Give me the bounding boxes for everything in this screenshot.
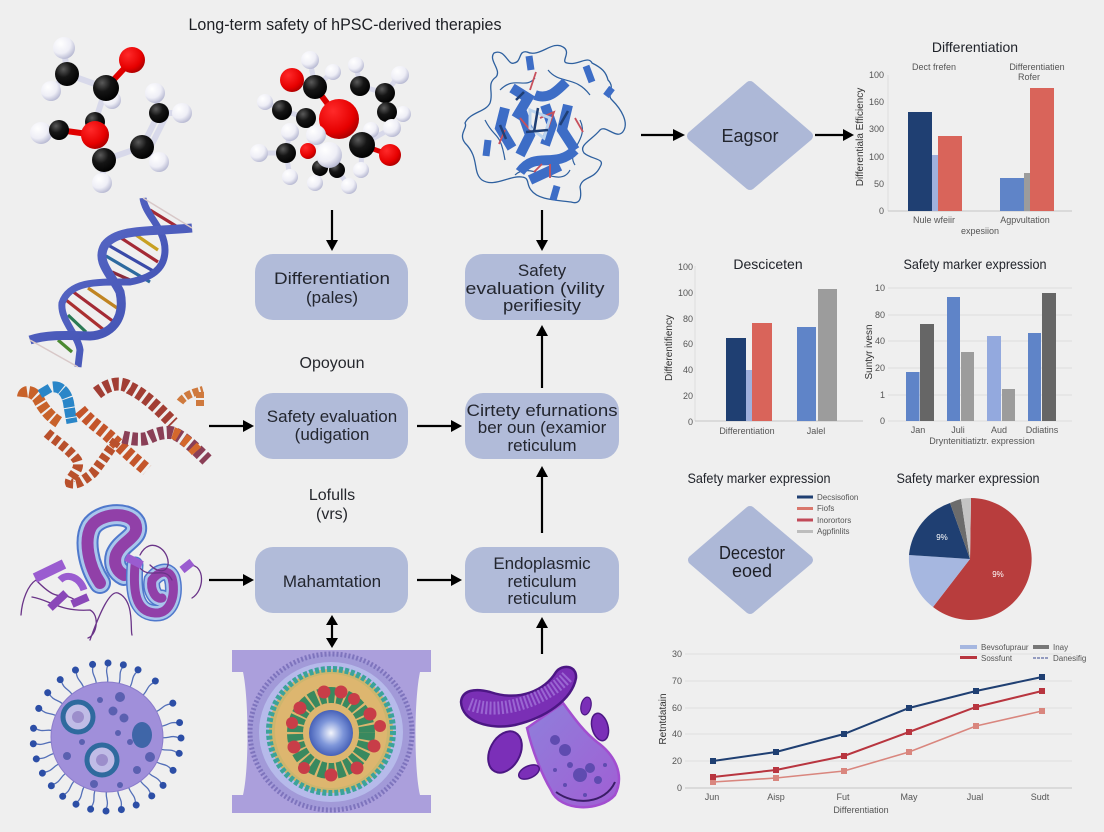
bar chart: desciceten: 80 [683, 314, 693, 324]
box: endoplasmic reticulum: reticulum [508, 589, 576, 608]
bar chart: desciceten: 0 [688, 417, 693, 427]
bar chart: desciceten [664, 256, 863, 436]
bar chart: safety marker expression: 20 [875, 363, 885, 373]
diamond: decestor [693, 511, 808, 609]
bar chart: differentiation: Differentiatien [1009, 62, 1065, 72]
box: differentiation [255, 254, 408, 320]
pie chart: safety marker expression [909, 498, 1032, 620]
bar chart: desciceten: 60 [683, 339, 693, 349]
icon: blue protein ribbon structure [462, 45, 625, 203]
box: safety evaluation top: Safety [518, 261, 567, 280]
legend: diamond section: Fiofs [817, 504, 834, 513]
label: lofulls: (vrs) [316, 506, 348, 523]
bar chart: differentiation [855, 39, 1072, 236]
pie chart: safety marker expression: 9% [936, 533, 948, 542]
bar chart: desciceten: Jalel [807, 426, 825, 436]
icon: stem cell with surface receptors [29, 660, 184, 814]
bar chart: safety marker expression: Aud [991, 425, 1007, 435]
arrow: mahamtation to endoplasmic [417, 574, 462, 586]
line chart: differentiation: Sossfunt [981, 654, 1013, 663]
arrow: up from mitochondrion [536, 617, 548, 654]
bar chart: differentiation: Dect frefen [912, 62, 956, 72]
box: reticulum middle: Cirtety efurnations [466, 401, 618, 420]
bar chart: safety marker expression: Juli [951, 425, 965, 435]
bar chart: differentiation: Differentiala Efficiency [855, 88, 866, 186]
arrow: down to safety [536, 210, 548, 251]
icon: orange alpha-helix protein [23, 384, 207, 484]
heading: safety marker expression right: Safety marker expression [896, 470, 1040, 486]
bar chart: safety marker expression: 10 [875, 283, 885, 293]
line chart: differentiation: Fut [836, 792, 850, 802]
bar chart: safety marker expression: 1 [880, 390, 885, 400]
bar chart: desciceten: 100 [678, 288, 693, 298]
bar chart: differentiation: 50 [874, 179, 884, 189]
line chart: differentiation: Jun [705, 792, 719, 802]
legend: diamond section [797, 493, 858, 536]
icon: mitochondrion [461, 667, 619, 807]
line chart: differentiation: Inay [1053, 643, 1068, 652]
line chart: differentiation [658, 643, 1086, 815]
box: reticulum middle: ber oun (examior [478, 418, 607, 437]
box: reticulum middle [465, 393, 619, 459]
bar chart: differentiation: 100 [869, 152, 884, 162]
box: differentiation: (pales) [306, 288, 358, 307]
line chart: differentiation: Aisp [767, 792, 785, 802]
line chart: differentiation: 60 [672, 703, 682, 713]
box: endoplasmic reticulum [465, 547, 619, 613]
bar chart: desciceten: 20 [683, 391, 693, 401]
box: safety evaluation top [465, 254, 619, 320]
arrow: safety evaluation to reticulum [417, 420, 462, 432]
legend: diamond section: Inorortors [817, 516, 851, 525]
label: lofulls [309, 487, 355, 523]
diamond: decestor: Decestor [719, 543, 785, 563]
line chart: differentiation: Danesifig [1053, 654, 1086, 663]
diamond: eagsor: Eagsor [721, 126, 779, 146]
line chart: differentiation: Retntdatain [658, 693, 669, 745]
bar chart: differentiation: 0 [879, 206, 884, 216]
line chart: differentiation: May [900, 792, 918, 802]
arrow: eagsor to chart [815, 129, 854, 141]
title: Long-term safety of hPSC-derived therapies [188, 15, 502, 34]
bar chart: desciceten: Differentifiency [664, 315, 675, 381]
line chart: differentiation: Sudt [1031, 792, 1050, 802]
arrow: up to safety [536, 325, 548, 388]
box: safety evaluation middle: (udigation [295, 425, 369, 444]
label: opoyoun: Opoyoun [300, 355, 364, 372]
legend: diamond section: Agpfinlits [817, 527, 849, 536]
box: safety evaluation middle: Safety evaluation [267, 407, 397, 426]
icon: small molecule ball-and-stick model [30, 37, 192, 193]
bar chart: safety marker expression [864, 256, 1072, 446]
box: safety evaluation top: perifiesity [503, 296, 582, 315]
label: lofulls: Lofulls [309, 487, 355, 504]
bar chart: safety marker expression: 0 [880, 416, 885, 426]
box: mahamtation: Mahamtation [283, 572, 381, 591]
legend: diamond section: Decsisofion [817, 493, 858, 502]
arrow: down to differentiation [326, 210, 338, 251]
box: reticulum middle: reticulum [508, 436, 576, 455]
bar chart: desciceten: Desciceten [733, 256, 803, 272]
bar chart: differentiation: Rofer [1018, 72, 1040, 82]
bar chart: differentiation: 100 [869, 70, 884, 80]
bar chart: differentiation: Differentiation [932, 39, 1018, 55]
box: mahamtation [255, 547, 408, 613]
line chart: differentiation: 20 [672, 756, 682, 766]
line chart: differentiation: Differentiation [833, 805, 889, 815]
line chart: differentiation: Bevsofupraur [981, 643, 1029, 652]
diamond: decestor: eoed [732, 561, 772, 581]
arrow: protein to safety evaluation [209, 420, 254, 432]
arrow: protein to eagsor [641, 129, 685, 141]
icon: purple beta-sheet protein [21, 515, 202, 640]
line chart: differentiation: 70 [672, 676, 682, 686]
box: endoplasmic reticulum: reticulum [508, 572, 576, 591]
bar chart: desciceten: 40 [683, 365, 693, 375]
arrow: up to reticulum [536, 466, 548, 533]
icon: complex molecule ball-and-stick model [250, 51, 411, 194]
bar chart: differentiation: Agpvultation [1000, 215, 1050, 225]
bar chart: safety marker expression: Safety marker expression [904, 256, 1046, 272]
line chart: differentiation: 40 [672, 729, 682, 739]
box: differentiation: Differentiation [274, 269, 390, 288]
heading: safety marker expression left: Safety marker expression [688, 470, 830, 486]
diamond: eagsor [692, 86, 808, 185]
line chart: differentiation: 0 [677, 783, 682, 793]
box: safety evaluation middle [255, 393, 408, 459]
bar chart: differentiation: expesiion [961, 226, 999, 236]
bar chart: safety marker expression: Dryntenitiatiztr. expression [929, 436, 1035, 446]
icon: DNA double helix [30, 198, 192, 367]
bar chart: desciceten: 100 [678, 262, 693, 272]
bar chart: differentiation: Nule wfeiir [913, 215, 955, 225]
bar chart: safety marker expression: Jan [911, 425, 925, 435]
bar chart: safety marker expression: Ddiatins [1026, 425, 1059, 435]
bar chart: safety marker expression: Suntyr ivesn [864, 324, 875, 380]
arrow: double between mahamtation and organelle [326, 615, 338, 648]
box: endoplasmic reticulum: Endoplasmic [493, 554, 591, 573]
box: safety evaluation top: evaluation (vility [466, 279, 605, 298]
bar chart: safety marker expression: 80 [875, 310, 885, 320]
bar chart: differentiation: 300 [869, 124, 884, 134]
pie chart: safety marker expression: 9% [992, 570, 1004, 579]
bar chart: differentiation: 160 [869, 97, 884, 107]
bar chart: safety marker expression: 40 [875, 336, 885, 346]
icon: cross-section of cell organelle [232, 650, 431, 813]
line chart: differentiation: Jual [967, 792, 983, 802]
arrow: protein to mahamtation [209, 574, 254, 586]
line chart: differentiation: 30 [672, 649, 682, 659]
bar chart: desciceten: Differentiation [719, 426, 775, 436]
